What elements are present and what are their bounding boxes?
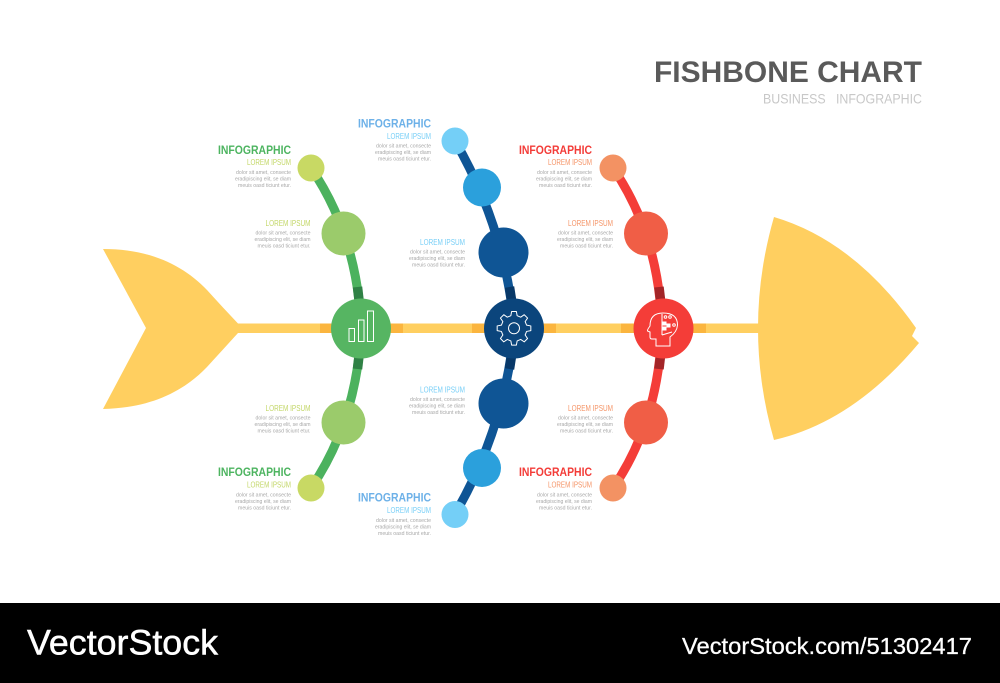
text: blue bottom: meuis oasd ticiunt etur. [378,531,431,537]
text: blue top: dolor sit amet, consecte [376,144,431,150]
text: green bottom: LOREM IPSUM [247,480,291,490]
text: green lower middle: LOREM IPSUM [266,404,311,413]
text: blue upper middle: meuis oasd ticiunt etur. [412,262,465,268]
text: green upper middle: LOREM IPSUM [266,219,311,228]
text: red bottom: dolor sit amet, consecte [537,492,592,498]
text: red lower middle: eradipiscing elit, se diam [557,422,613,428]
text: red bottom: eradipiscing elit, se diam [536,499,592,505]
text: blue top: eradipiscing elit, se diam [375,150,431,156]
red top small node [600,154,626,182]
text: green bottom: eradipiscing elit, se diam [235,499,291,505]
text: red upper middle: LOREM IPSUM [568,219,613,228]
green top medium node [322,212,366,256]
text: red lower middle: dolor sit amet, consecte [558,416,613,422]
red branch [600,154,694,502]
text: blue lower middle: LOREM IPSUM [420,386,465,394]
green bone joints [358,287,359,369]
text: blue upper middle: eradipiscing elit, se diam [409,256,465,262]
text: green lower middle: eradipiscing elit, se diam [254,422,310,428]
text: red top: dolor sit amet, consecte [537,170,592,176]
text: red upper middle: dolor sit amet, consecte [558,230,613,236]
blue bone joints [510,287,512,369]
text: red upper middle: meuis oasd ticiunt etur. [560,244,613,250]
text: blue lower middle: meuis oasd ticiunt etur. [412,410,465,416]
green bones [311,168,359,488]
text: green bottom: dolor sit amet, consecte [236,492,291,498]
red top medium node [624,212,668,256]
icon: bar chart [349,311,374,342]
text: blue bottom: dolor sit amet, consecte [376,518,431,524]
text: green top: dolor sit amet, consecte [236,170,291,176]
icon: gear [497,311,531,345]
blue bottom small node [442,501,468,528]
blue branch [442,128,544,528]
text: green top: meuis oasd ticiunt etur. [238,183,291,189]
text: green top [218,144,292,189]
text: blue top: meuis oasd ticiunt etur. [378,156,431,162]
text: red top [519,144,593,189]
text: red upper middle [557,219,613,250]
text: red lower middle [557,404,613,434]
blue top small node [442,128,468,154]
blue bottom large node [478,378,528,428]
text: blue bottom: LOREM IPSUM [387,506,431,515]
blue top mid node [463,168,501,206]
blue bones [455,141,511,514]
red bottom medium node [624,400,668,444]
text: green top: INFOGRAPHIC [218,144,292,157]
fish head [758,217,919,440]
fish spine [236,324,762,333]
green hub [331,298,391,358]
text: red bottom: INFOGRAPHIC [519,466,593,479]
text: red lower middle: LOREM IPSUM [568,404,613,413]
green top small node [298,154,324,182]
text: red lower middle: meuis oasd ticiunt etur. [560,428,613,434]
green bottom small node [298,474,324,502]
red bones [613,168,660,488]
title: FISHBONE CHART [654,56,922,89]
text: green top: LOREM IPSUM [247,158,291,167]
blue top large node [478,228,528,278]
text: green bottom: INFOGRAPHIC [218,466,292,479]
blue hub [484,298,544,358]
text: blue top [358,118,432,162]
blue bottom mid node [463,449,501,487]
text: green bottom: meuis oasd ticiunt etur. [238,506,291,512]
text: red bottom: LOREM IPSUM [548,480,592,490]
subtitle: BUSINESS INFOGRAPHIC [763,90,922,106]
red hub [634,298,694,358]
text: green lower middle [254,404,311,434]
icon: head with circuit [647,313,678,346]
text: blue lower middle [409,386,465,416]
text: red bottom [519,466,593,512]
footer bar [0,603,1000,683]
text: green upper middle: meuis oasd ticiunt etur. [258,244,310,250]
text: blue top: LOREM IPSUM [387,132,431,141]
green branch [298,154,391,502]
text: red top: eradipiscing elit, se diam [536,176,592,182]
text: green lower middle: meuis oasd ticiunt etur. [258,428,310,434]
text: blue lower middle: eradipiscing elit, se diam [409,404,465,410]
text: blue bottom: INFOGRAPHIC [358,492,432,504]
text: blue bottom: eradipiscing elit, se diam [375,524,431,530]
text: blue top: INFOGRAPHIC [358,118,432,130]
text: blue upper middle [409,238,465,268]
text: green upper middle [254,219,311,250]
text: red bottom: meuis oasd ticiunt etur. [539,506,592,512]
text: blue lower middle: dolor sit amet, consecte [410,397,465,403]
green bottom medium node [322,400,366,444]
spine joints [320,324,706,333]
text: green upper middle: dolor sit amet, consecte [256,230,311,236]
text: green top: eradipiscing elit, se diam [235,176,291,182]
fish tail [103,249,238,409]
footer url: VectorStock.com/51302417 [682,633,972,659]
text: blue bottom [358,492,432,537]
text: red top: meuis oasd ticiunt etur. [539,183,592,189]
red bone joints [659,287,660,369]
text: green lower middle: dolor sit amet, consecte [256,416,311,422]
text: green upper middle: eradipiscing elit, se diam [254,237,310,243]
text: green bottom [218,466,292,512]
footer brand: VectorStock [27,623,219,662]
text: red top: INFOGRAPHIC [519,144,593,157]
text: blue upper middle: dolor sit amet, consecte [410,250,465,256]
text: red upper middle: eradipiscing elit, se diam [557,237,613,243]
red bottom small node [600,474,626,502]
text: red top: LOREM IPSUM [548,158,592,167]
text: blue upper middle: LOREM IPSUM [420,238,465,247]
